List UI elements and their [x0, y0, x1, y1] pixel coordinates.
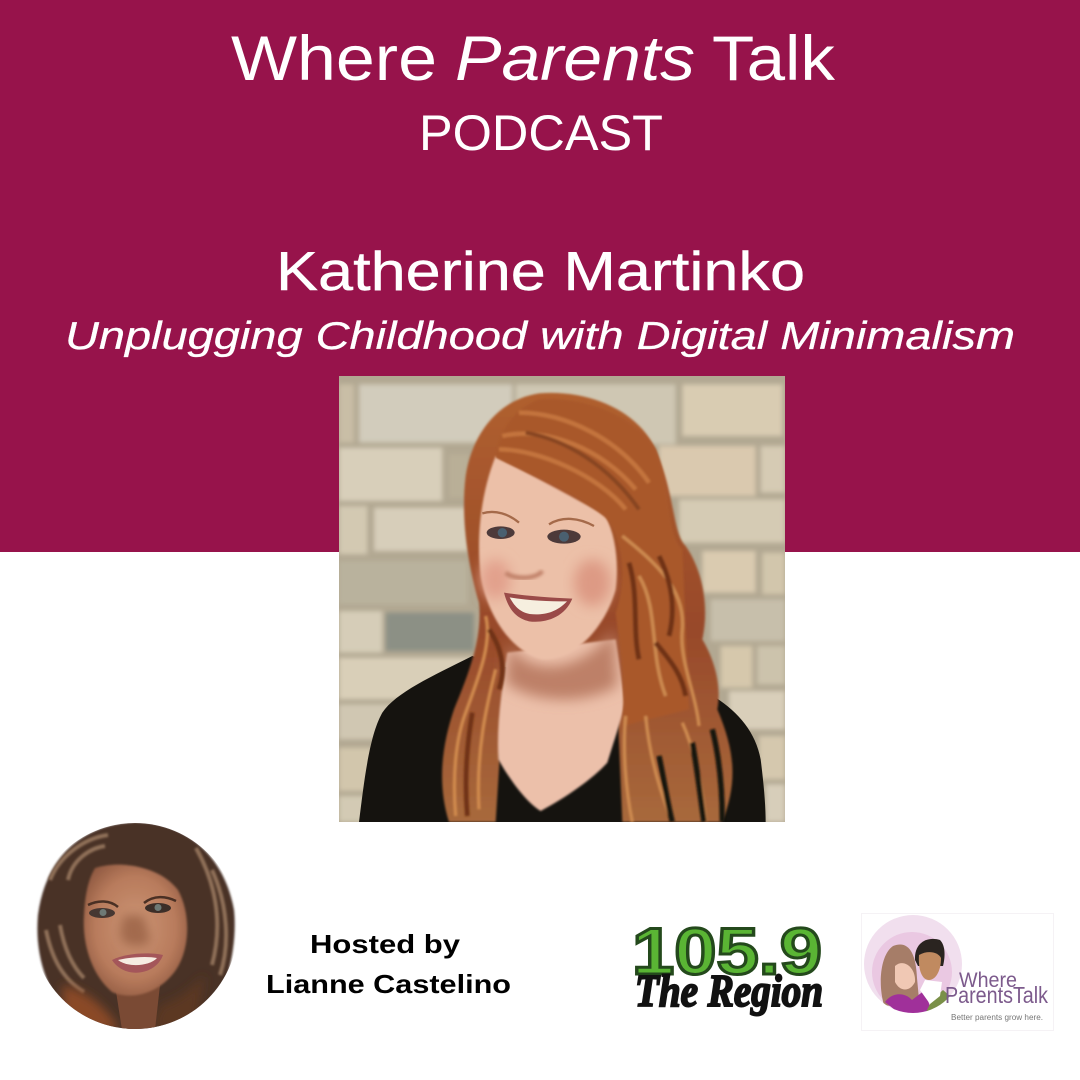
guest face [479, 456, 617, 659]
maroon header banner [0, 0, 1080, 552]
logo: 105.9 The Region: The Region [635, 965, 823, 1016]
episode title: Unplugging Childhood with Digital Minimalism [65, 315, 1015, 358]
title: Where Parents Talk: Where [231, 24, 437, 94]
logo: 105.9 The Region: 105.9 [632, 914, 822, 988]
host portrait circle [30, 820, 240, 1032]
logo wordmark [945, 969, 1048, 1022]
logo couple illustration [881, 939, 950, 1014]
title: Where Parents Talk [231, 24, 836, 94]
hosted by caption: Lianne Castelino [266, 969, 511, 999]
guest name: Katherine Martinko [276, 240, 805, 302]
guest shirt [359, 656, 766, 822]
title: Where Parents Talk: Parents [455, 24, 695, 94]
guest portrait photo [339, 376, 785, 822]
guest eyebrows, eyes, nose and smile [482, 512, 594, 622]
hosted by caption [266, 929, 511, 999]
logo wordmark: ParentsTalk [945, 982, 1048, 1008]
title: Where Parents Talk: Talk [712, 24, 836, 94]
logo: Where Parents Talk [862, 914, 1054, 1030]
logo: 105.9 The Region [632, 914, 823, 1016]
guest neck shadow [506, 629, 617, 699]
host neck [115, 985, 160, 1030]
host nose shadow [120, 915, 150, 946]
host hair [37, 822, 235, 1030]
logo wordmark: Better parents grow here. [951, 1013, 1043, 1022]
guest cheeks [481, 559, 511, 599]
hosted by caption: Hosted by [310, 929, 461, 959]
guest chest and neck [498, 639, 625, 811]
host eyebrows, eyes and smile [88, 897, 176, 907]
logo wordmark: Where [959, 969, 1017, 992]
guest side-swept fringe and hair strands [454, 399, 722, 822]
host face [84, 865, 187, 996]
guest hair back [442, 393, 732, 822]
subtitle: PODCAST: PODCAST [419, 105, 663, 161]
